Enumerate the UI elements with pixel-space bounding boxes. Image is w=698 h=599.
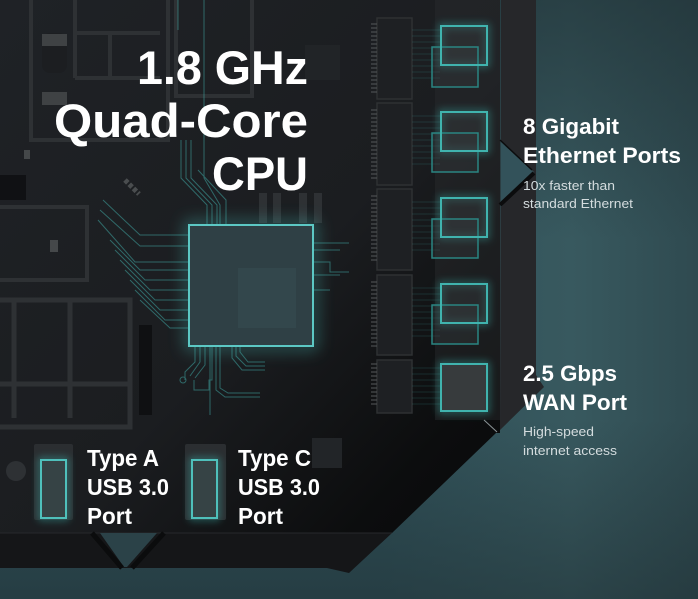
- label: Ethernet ports: standard Ethernet: [523, 196, 633, 211]
- label: Ethernet ports: 8 Gigabit: [523, 114, 620, 139]
- notch: bottom edge: [92, 533, 164, 568]
- CPU chip: [189, 225, 313, 346]
- WAN port icon: [441, 364, 487, 411]
- label: WAN port: 2.5 Gbps: [523, 361, 617, 386]
- title: CPU: [212, 147, 308, 200]
- label: Type A USB: USB 3.0: [87, 474, 169, 500]
- title: [54, 41, 308, 200]
- title: Quad-Core: [54, 94, 308, 147]
- port 2: [432, 112, 487, 172]
- USB Type C port icon: [185, 444, 226, 520]
- trace lines to ports: [412, 30, 440, 404]
- label: Type A USB: [87, 445, 169, 529]
- label: Type A USB: Port: [87, 503, 132, 529]
- notch: right edge: [500, 140, 534, 207]
- USB Type A port icon: [34, 444, 73, 520]
- label: Type A USB: Type A: [87, 445, 159, 471]
- label: WAN port: internet access: [523, 443, 618, 458]
- title: 1.8 GHz: [137, 41, 308, 94]
- label: Ethernet ports: [523, 114, 681, 211]
- label: Ethernet ports: 10x faster than: [523, 178, 615, 193]
- port 4: [432, 284, 487, 344]
- router body: [0, 0, 544, 573]
- label: WAN port: [523, 361, 628, 458]
- port 1: [432, 26, 487, 87]
- chips: [371, 18, 412, 413]
- label: Ethernet ports: Ethernet Ports: [523, 143, 681, 168]
- label: Type C USB: USB 3.0: [238, 474, 320, 500]
- label: Type C USB: Type C: [238, 445, 311, 471]
- label: Type C USB: Port: [238, 503, 283, 529]
- label: WAN port: High-speed: [523, 424, 594, 439]
- label: Type C USB: [238, 445, 320, 529]
- Ethernet port icons: [432, 26, 487, 344]
- circuit board details: [0, 0, 342, 481]
- port 3: [432, 198, 487, 258]
- circuit traces: [98, 0, 349, 415]
- label: WAN port: WAN Port: [523, 390, 628, 415]
